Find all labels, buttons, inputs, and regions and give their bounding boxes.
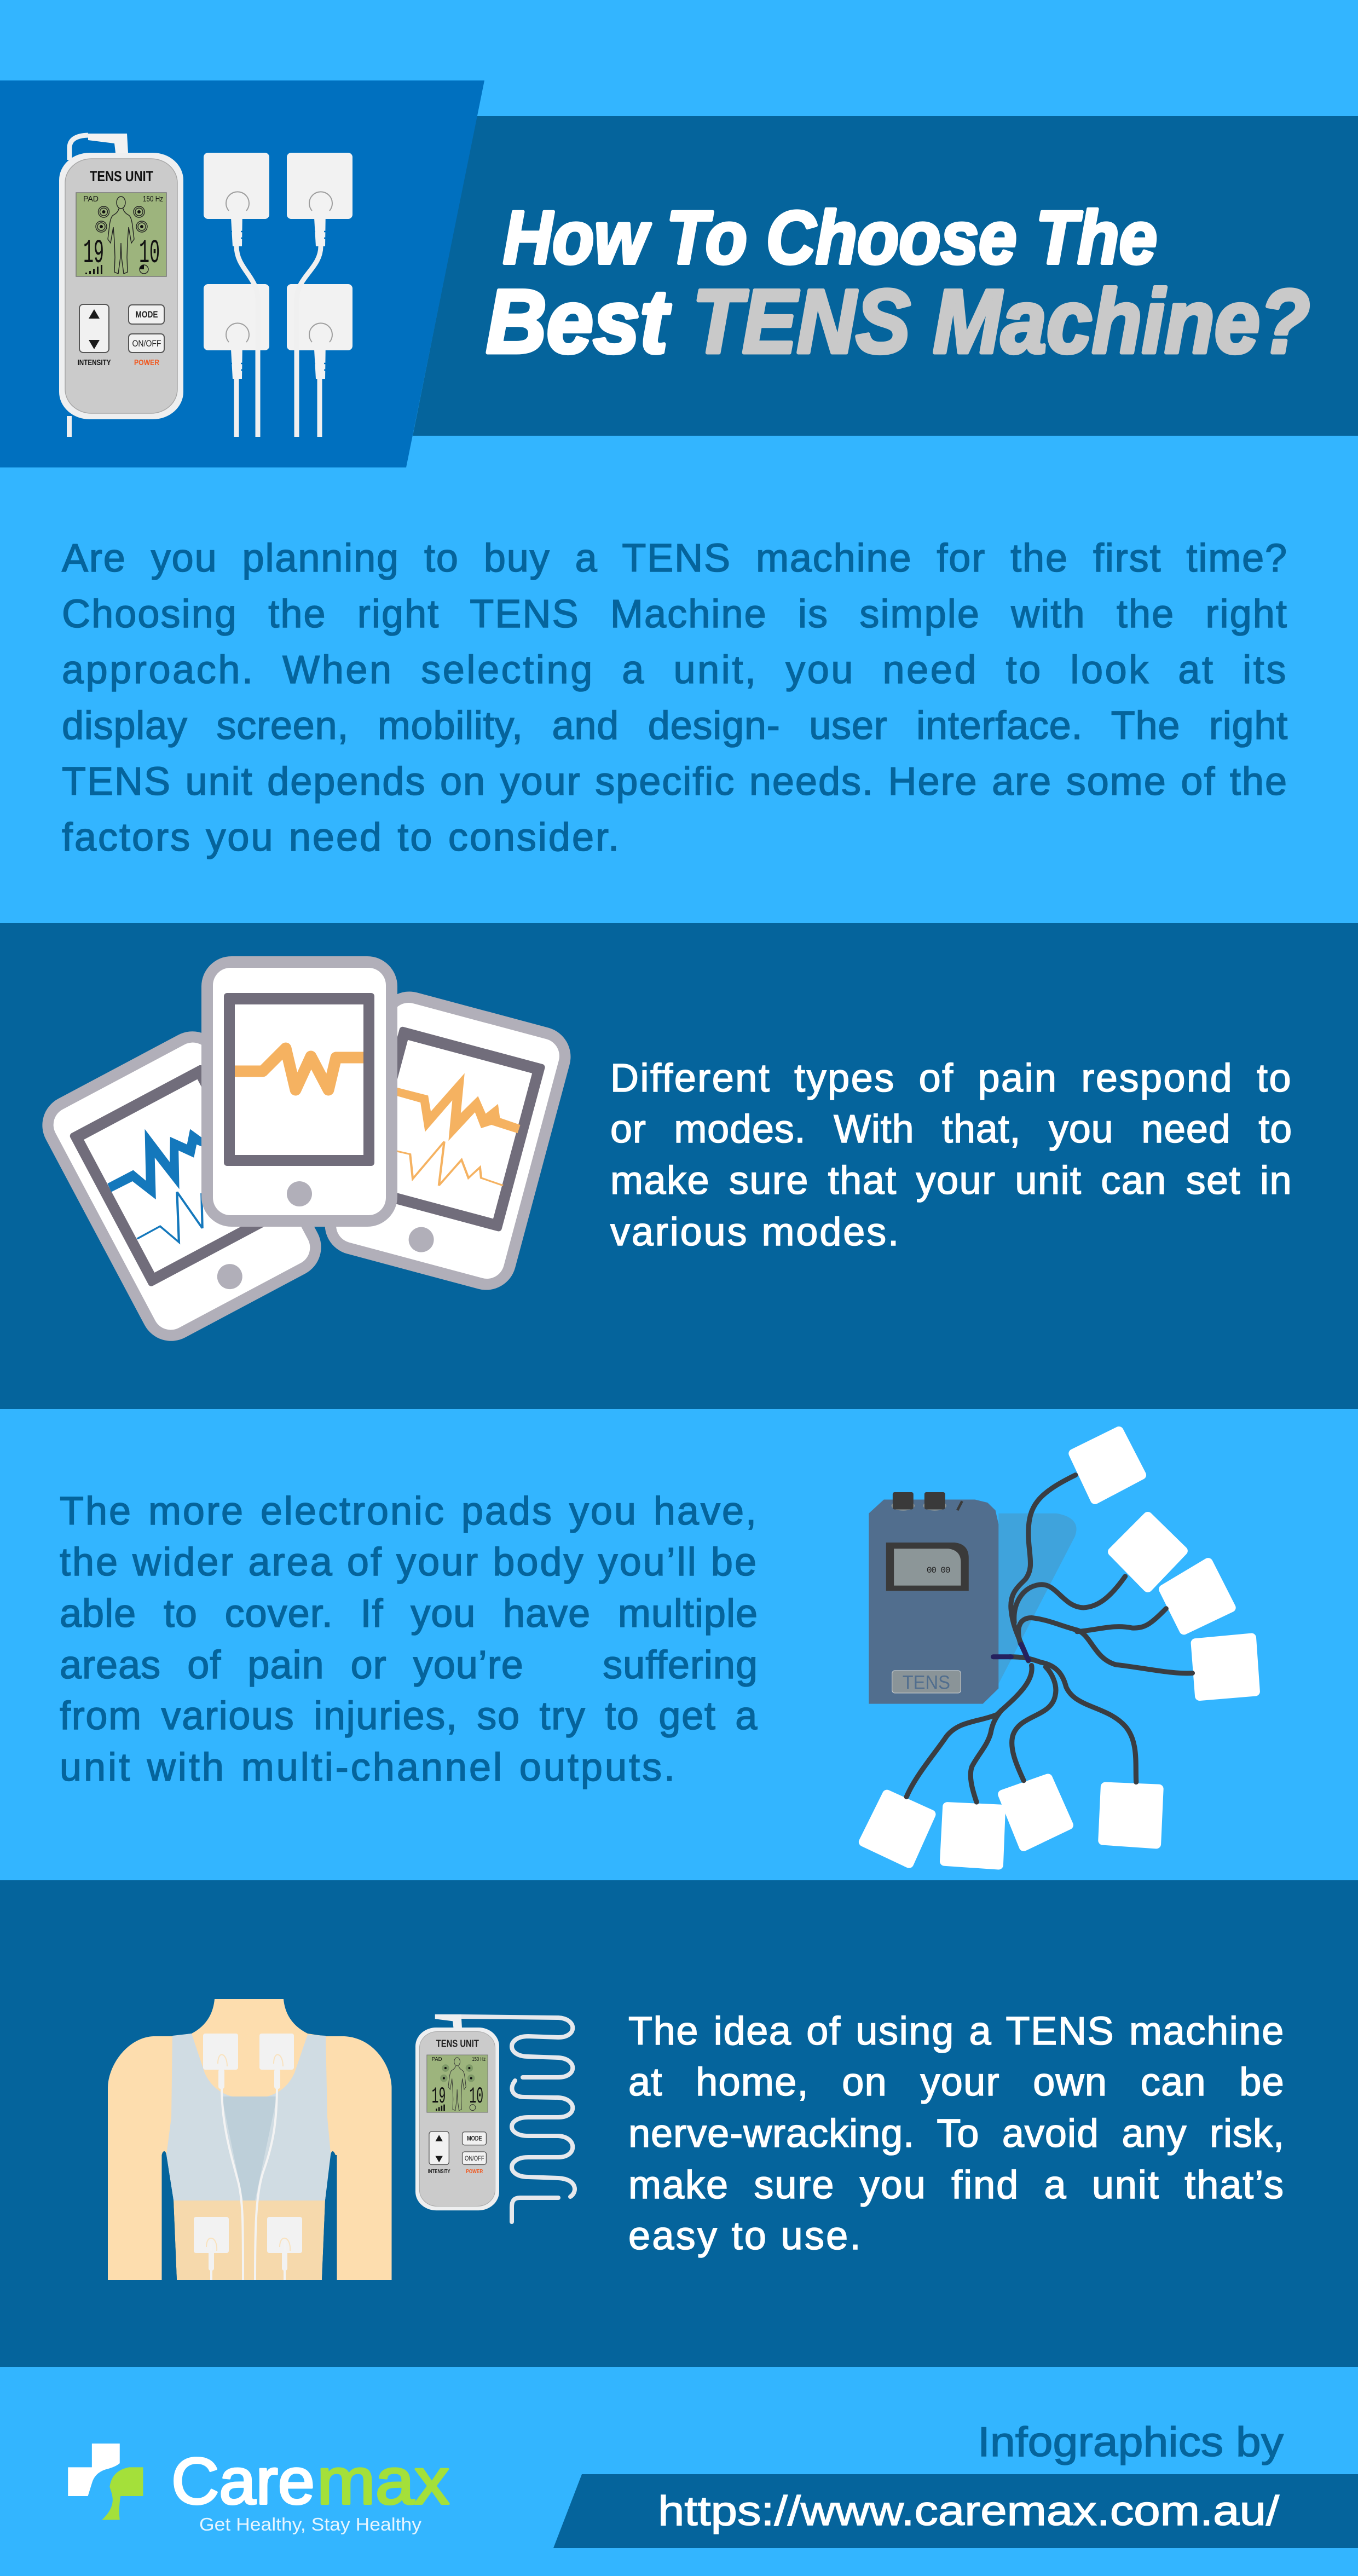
text block: pain modes: Different types of pain respond to	[610, 1056, 1292, 1100]
panel: modes section background	[0, 923, 1358, 1409]
panel: header device background	[0, 80, 484, 467]
text block: introduction: approach. When selecting a unit, you need to look at its	[62, 648, 1288, 692]
text block: ease of use: easy to use.	[628, 2214, 863, 2258]
text block: pain modes	[610, 1056, 1292, 1254]
text block: ease of use: The idea of using a TENS machine	[628, 2009, 1285, 2053]
footer credit: Infographics by	[978, 2419, 1284, 2465]
icon: wearable section TENS unit: TENS UNIT	[436, 2038, 479, 2049]
text block: electrode pads: The more electronic pads you have,	[60, 1489, 758, 1533]
text block: introduction: TENS unit depends on your specific needs. Here are some of the	[62, 760, 1288, 804]
text block: pain modes: make sure that your unit can set in	[610, 1159, 1292, 1203]
panel: ease of use section background	[0, 1880, 1358, 2367]
icon: header TENS unit: ON/OFF	[132, 338, 161, 349]
icon: header TENS unit: 10	[139, 235, 160, 273]
icon: header TENS unit: TENS UNIT	[90, 168, 153, 184]
title: How To Choose The	[503, 196, 1157, 280]
text block: pain modes: or modes. With that, you need to	[610, 1107, 1292, 1151]
icon: wearable section TENS unit: INTENSITY	[428, 2169, 450, 2175]
icon: header TENS unit: POWER	[134, 358, 159, 367]
icon: wearable section TENS unit: POWER	[466, 2169, 483, 2175]
icon: wearable section TENS unit: MODE	[467, 2135, 482, 2142]
icon: header TENS unit: 150 Hz	[143, 194, 163, 204]
logo: Caremax wordmark: Care	[171, 2445, 315, 2518]
icon: multi-channel TENS unit with pads	[863, 1431, 1255, 1865]
logo: Caremax wordmark	[171, 2445, 449, 2518]
icon: center phone	[201, 956, 397, 1227]
icon: header TENS unit: 19	[83, 235, 104, 273]
text block: ease of use: nerve-wracking. To avoid any risk,	[628, 2112, 1285, 2156]
icon: wearable section TENS unit: 19	[432, 2084, 446, 2110]
icon: wearable section TENS unit: 150 Hz	[472, 2057, 486, 2063]
icon: multi-channel TENS unit with pads: 00 00	[927, 1566, 950, 1575]
text block: introduction: Are you planning to buy a TENS machine for the first time?	[62, 536, 1288, 580]
logo: Caremax cross mark	[68, 2444, 143, 2520]
icon: torso wearing electrode pads	[108, 1999, 392, 2280]
title: TENS Machine?	[692, 271, 1310, 372]
icon: header TENS unit: PAD	[83, 194, 99, 204]
text block: introduction: display screen, mobility, and design- user interface. The right	[62, 704, 1288, 748]
icon: wearable section TENS unit: ON/OFF	[465, 2156, 484, 2162]
panel: title band	[413, 116, 1358, 436]
icon: multi-channel TENS unit with pads: TENS	[903, 1672, 950, 1694]
icon: left phone	[32, 1021, 332, 1351]
icon: header electrode pads	[204, 153, 352, 437]
panel: footer url band	[553, 2474, 1358, 2548]
chart: right phone waveform	[396, 1073, 521, 1186]
text block: introduction	[61, 536, 1288, 859]
logo: Caremax wordmark: max	[317, 2445, 449, 2518]
text block: ease of use: at home, on your own can be	[628, 2060, 1285, 2104]
title	[486, 196, 1310, 372]
icon: wearable section TENS unit: PAD	[432, 2057, 442, 2063]
chart: left phone waveform	[107, 1129, 204, 1242]
text block: electrode pads: from various injuries, so try to get a	[60, 1694, 758, 1738]
logo: tagline: Get Healthy, Stay Healthy	[199, 2514, 422, 2534]
text block: introduction: factors you need to consider.	[62, 816, 621, 859]
icon: wearable section TENS unit	[415, 2014, 499, 2210]
icon: header TENS unit: INTENSITY	[78, 358, 111, 367]
icon: coiled lead wire	[455, 2017, 575, 2222]
icon: header TENS unit	[59, 134, 183, 437]
icon: wearable section TENS unit: 10	[469, 2084, 483, 2110]
text block: electrode pads: unit with multi-channel outputs.	[60, 1746, 677, 1789]
icon: right phone	[318, 985, 577, 1297]
title: Best	[486, 271, 671, 372]
text block: electrode pads: areas of pain or you’re suffering	[60, 1643, 758, 1687]
text block: introduction: Choosing the right TENS Machine is simple with the right	[62, 592, 1288, 636]
text block: pain modes: various modes.	[610, 1210, 900, 1254]
icon: header TENS unit: MODE	[136, 309, 158, 320]
text block: electrode pads: the wider area of your body you’ll be	[60, 1540, 758, 1584]
text block: ease of use	[628, 2009, 1285, 2258]
footer url: https://www.caremax.com.au/	[658, 2488, 1280, 2534]
text block: ease of use: make sure you find a unit that’s	[628, 2163, 1285, 2207]
text block: electrode pads	[60, 1489, 758, 1789]
text block: electrode pads: able to cover. If you have multiple	[60, 1592, 758, 1636]
